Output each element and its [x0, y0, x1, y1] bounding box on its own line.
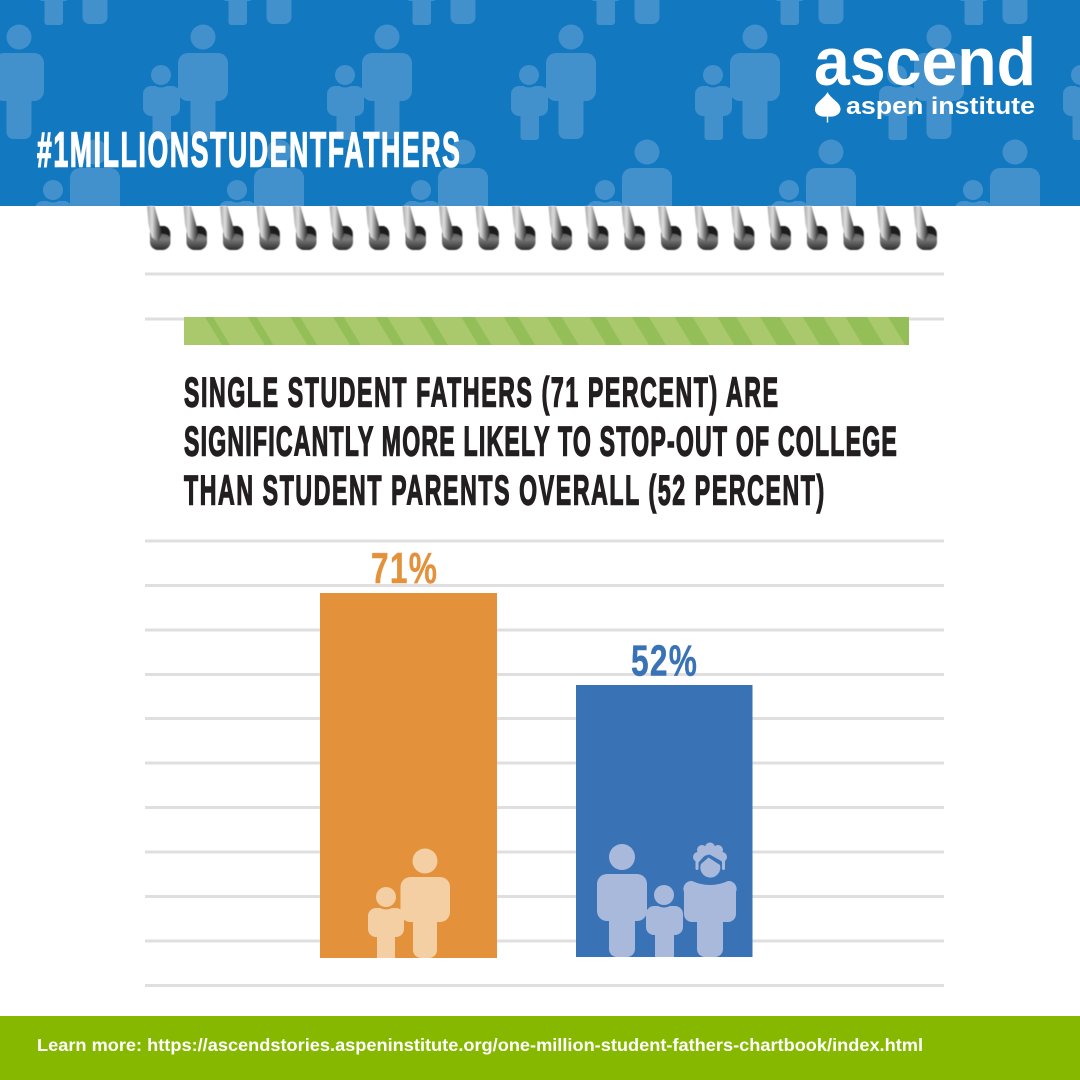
hashtag heading: #1MILLIONSTUDENTFATHERS [37, 123, 460, 178]
ascend aspen institute logo [814, 24, 1036, 122]
icon: aspen leaf [815, 92, 841, 122]
bar: single student fathers 71% [320, 544, 497, 958]
footer link text: Learn more: https://ascendstories.aspeninstitute.org/one-million-student-fathers-chartbook/index.html [37, 1035, 923, 1055]
icon: father and child [368, 848, 450, 958]
value label 71%: 71% [371, 544, 437, 593]
chart title: SINGLE STUDENT FATHERS (71 PERCENT) ARE [184, 369, 778, 416]
header banner [0, 0, 1080, 206]
icon: two parents and child [597, 842, 737, 957]
logo wordmark: ascend: ascend [814, 24, 1036, 100]
logo wordmark: aspen institute: aspen institute [846, 93, 1035, 120]
banner pattern: parent and child silhouettes [0, 0, 1080, 255]
notebook ruled lines [145, 272, 944, 987]
chart title: SIGNIFICANTLY MORE LIKELY TO STOP-OUT OF COLLEGE [184, 418, 897, 465]
chart title: THAN STUDENT PARENTS OVERALL (52 PERCENT) [184, 467, 824, 514]
green striped bar [184, 317, 928, 345]
chart title [184, 369, 897, 514]
footer banner [0, 1016, 1080, 1080]
bar: student parents overall 52% [576, 636, 752, 957]
notebook spiral binding [147, 206, 937, 250]
value label 52%: 52% [631, 636, 697, 686]
